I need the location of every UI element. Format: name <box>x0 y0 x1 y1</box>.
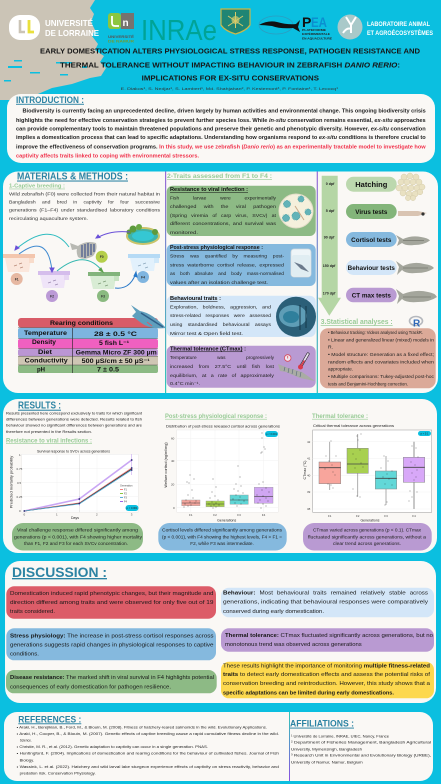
captive breeding text: recirculating aquaculture system. <box>9 216 88 221</box>
chart: cortisol boxplot: Welfare cortisol (ng/ml/mg) <box>164 442 168 488</box>
chart: cortisol boxplot: p < 0.001 <box>266 432 278 436</box>
reference list: Science. <box>20 739 32 743</box>
logo: Université de Lorraine: UNIVERSITÉ <box>45 17 93 28</box>
introduction text: highlights the need for effective conservation strategies to prevent further species loss. While in-situ conservation remains essential, ex-situ approaches <box>16 118 426 124</box>
caption: viral challenge: Viral challenge response differed significantly among <box>17 528 138 533</box>
affiliation list: ² Department of Fisheries Management, Bangladesh Agricultural <box>291 741 431 745</box>
captive breeding text: Wild zebrafish (F0) were collected from their natural habitat in <box>9 191 161 196</box>
header background texture <box>0 0 106 100</box>
timeline arrow: 170 dpf <box>323 291 336 295</box>
reference list: • Wassink, L. et al. (2022). Hatchery and wild larval lake sturgeon experience effects of captivity on stress reactivity, behavior and <box>17 765 279 769</box>
chart: survival response line chart: 0.75 <box>16 467 23 471</box>
caption: CTmax variation: fluctuated significantly across generations, without a <box>308 534 426 539</box>
box: conclusion highlight: specific adaptations can be limited during early domestications. <box>223 691 395 697</box>
box: statistical analyses: • Multiple comparisons: Tukey-adjusted post-hoc <box>328 374 435 379</box>
title: THERMAL TOLERANCE WITHOUT IMPACTING BEHAVIOUR IN ZEBRAFISH DANIO RERIO : <box>60 60 400 69</box>
heading: references: REFERENCES : <box>18 714 81 725</box>
chart: survival response line chart: 3 <box>131 512 133 516</box>
box: thermal tolerance: Thermal tolerance: CTmax fluctuated significantly across generations, but no <box>225 633 433 639</box>
heading: materials and methods: MATERIALS & METHODS : <box>17 170 128 182</box>
chart: survival response line chart: 0 <box>24 512 26 516</box>
rearing conditions table: 500 µS/cm ± 50 µS⁻¹ <box>82 358 150 365</box>
tank F1: F1 <box>15 277 19 281</box>
sub-heading: statistical analyses: 3.Statistical analyses : <box>321 319 393 326</box>
caption: cortisol levels: Cortisol levels differed significantly among generations <box>162 528 283 533</box>
card: thermal tolerance: Temperature was progressively <box>170 355 275 360</box>
rearing conditions table: 28 ± 0.5 °C <box>94 332 138 338</box>
tank F4: F4 <box>141 275 145 279</box>
logo: PEA aquaculture platform: PLATEFORME <box>302 28 326 32</box>
pill: virus tests: Virus tests <box>355 209 388 216</box>
card: resistance to viral infection: different concentrations, and survival was <box>170 221 277 226</box>
chart: cortisol boxplot <box>164 424 280 522</box>
chart: CTmax boxplot: F1 <box>328 514 332 518</box>
chart legend <box>120 484 133 503</box>
timeline arrow: 5 dpf <box>326 209 335 213</box>
rearing conditions table: Rearing conditions <box>50 320 113 327</box>
introduction text: improve the effectiveness of conservation programs. In this study, we use zebrafish ( Danio rerio ) as an experimentally tractable model to investigate how <box>16 144 426 150</box>
card: post-stress physiological response: Post-stress physiological response : <box>170 245 263 251</box>
panel: references and affiliations <box>4 712 433 781</box>
panel: materials and methods <box>3 170 438 393</box>
caption: viral challenge: generations (p < 0.001), with F4 showing higher mortality <box>14 534 143 539</box>
chart: CTmax boxplot: 38 <box>307 507 311 511</box>
caption: cortisol levels <box>158 523 287 550</box>
card: resistance to viral infection: (Spring viremia of carp virus, SVCv) at <box>170 213 277 218</box>
affiliation list: University, Mymensingh, Bangladesh <box>291 747 362 751</box>
icon: juvenile fish <box>396 235 430 246</box>
icon: R logo: R <box>413 318 421 330</box>
logo: PEA aquaculture platform <box>259 14 332 40</box>
icon: larva <box>398 211 427 216</box>
icon: large adult fish <box>396 289 437 304</box>
caption: viral challenge <box>12 523 143 550</box>
logo: Laboratoire Animal et Agroécosystèmes <box>338 14 434 40</box>
logo: university seal <box>221 9 250 34</box>
sub-heading: resistance to viral infections: Resistance to viral infections : <box>6 437 92 444</box>
timeline arrow: 150 dpf <box>323 264 336 268</box>
box: conclusion highlight: conservation breeding and reintroduction. However, this study shows that a <box>223 681 430 687</box>
rearing conditions table: Gemma Micro ZF 300 µm <box>76 351 157 357</box>
pill: behaviour tests: Behaviour tests <box>348 265 395 272</box>
reference list <box>17 726 279 776</box>
chart: CTmax boxplot: CTmax (°C) <box>303 460 307 480</box>
box: domestication summary: Domestication induced rapid phenotypic changes, but their magnitude and <box>10 591 214 597</box>
caption: cortisol levels: F2, while F3 was intermediate. <box>190 541 254 546</box>
box: statistical analyses: R. <box>328 344 333 349</box>
captive breeding text: Bangladesh and bred in captivity for four successive <box>9 200 160 205</box>
card: behavioural traits: stress-related responses were assessed <box>170 313 271 318</box>
introduction text: captivity affects traits linked to coping with environmental stressors. <box>16 154 200 160</box>
pill: hatching: Hatching <box>355 180 388 189</box>
affiliation list <box>291 734 431 764</box>
introduction text <box>16 108 426 160</box>
icon: eggs <box>396 173 425 201</box>
logo: PEA aquaculture platform: EA <box>311 14 327 30</box>
pill: CT max tests <box>346 288 397 302</box>
introduction text: can provide complementary tools to maintain threatened populations and preserve their genetic and phenotypic diversity. However, ex-situ conservation <box>16 126 426 132</box>
reference list: • Araki, H., Cooper, B., & Blouin, M. (2007). Genetic effects of captive breeding cause a rapid cumulative fitness decline in the wild. <box>17 732 279 736</box>
icon: fish over table <box>131 305 166 328</box>
logo: Université de Namur <box>108 13 135 44</box>
chart: CTmax boxplot: 40 <box>307 473 311 477</box>
box: statistical analyses: • Model structure: Generation as a fixed effect; <box>328 352 434 357</box>
chart: survival response line chart: 2 <box>96 512 98 516</box>
rearing conditions table: pH <box>37 366 45 373</box>
heading: discussion: DISCUSSION : <box>12 565 107 580</box>
rearing conditions table: Temperature <box>24 330 67 337</box>
pill: cortisol tests <box>346 232 397 247</box>
box: conclusion highlight: These results highlight the importance of monitoring multiple fitness-related <box>223 664 430 670</box>
card: post-stress physiological response: stress waterborne cortisol release, expressed <box>170 262 284 268</box>
chart: survival response line chart: 1 <box>56 512 58 516</box>
tank F3: F3 <box>101 294 105 298</box>
chart legend: Generation <box>120 484 133 488</box>
introduction text: Biodiversity is currently facing an unprecedented decline, driven largely by human activities and environmental change. This ongoing biodiversity crisis <box>22 108 426 114</box>
box: domestication summary: direction differed among traits and were observed for only five out of 19 <box>10 600 214 606</box>
caption: cortisol levels: (p < 0.001), with F4 showing the highest levels, F4 > F1 = <box>162 534 282 539</box>
chart: CTmax boxplot: F4 <box>412 514 416 518</box>
chart legend: F4 <box>124 500 128 503</box>
card: resistance to viral infection <box>167 186 316 236</box>
panel: results <box>3 399 437 553</box>
box: behaviour <box>221 588 434 617</box>
timeline arrow: 90 dpf <box>324 235 335 239</box>
panel: introduction <box>7 94 435 163</box>
box: statistical analyses: random effects and covariates included when <box>328 359 435 364</box>
logo: Université de Namur: UNIVERSITÉ <box>108 34 134 39</box>
card: behavioural traits: using standardised behavioural assays <box>170 322 272 327</box>
chart: CTmax boxplot: Critical thermal tolerance across generations <box>313 424 394 428</box>
chart: survival response line chart: 0.5 <box>17 481 22 485</box>
card: behavioural traits: Mirror test & Open field test. <box>170 331 243 336</box>
logo: Université de Lorraine <box>9 15 99 40</box>
card: resistance to viral infection: Resistance to viral infection : <box>170 187 248 193</box>
panel: discussion <box>5 561 436 703</box>
chart: CTmax boxplot: 39 <box>307 490 311 494</box>
results introduction text: Results presented here correspond exclusively to traits for which significant <box>6 411 143 416</box>
reference list: • Christie, M. R., et al. (2012). Genetic adaptation to captivity can occur in a single generation. PNAS. <box>17 745 208 749</box>
card: thermal tolerance <box>167 346 316 388</box>
rearing conditions table: Conductivity <box>25 358 68 365</box>
card: post-stress physiological response: values after an isolation challenge test. <box>170 280 268 285</box>
caption: viral challenge: than F1, F2 and F3 for each SVCv concentration. <box>24 541 128 546</box>
chart: survival response line chart <box>8 448 138 520</box>
card: behavioural traits: Behavioural traits : <box>170 296 221 302</box>
authors: E. Diakos¹, S. Nedjar¹, S. Lambert¹, Md. Shahjahan², P. Kestemont³, P. Fontaine¹, T. Lecocq¹ <box>121 86 339 91</box>
chart legend: F1 <box>124 488 128 491</box>
box: statistical analyses: • Behaviour tracking: Videos analysed using TrackR. <box>328 330 423 335</box>
card: resistance to viral infection: monitored. <box>170 230 198 235</box>
affiliation list: University of Namur, Namur, Belgium <box>291 760 363 764</box>
icon: adult fish <box>396 261 434 275</box>
chart: CTmax boxplot: p < 0.1 <box>421 432 429 436</box>
icon: alert, fish and thermometer <box>278 354 315 381</box>
chart: cortisol boxplot: Generations <box>217 518 236 522</box>
tank F2: F2 <box>50 294 54 298</box>
rearing conditions table: 7 ± 0.5 <box>97 367 120 373</box>
captive breeding text <box>9 191 161 221</box>
affiliation list: ³ Research Unit in Environmental and Evolutionary Biology (URBE), <box>291 754 431 758</box>
box: disease resistance <box>6 670 217 693</box>
rearing conditions table: Diet <box>38 349 53 356</box>
card: resistance to viral infection: Fish larvae were experimentally <box>170 196 277 200</box>
box: disease resistance: consequences of early domestication for pathogen resilience. <box>10 685 171 691</box>
arrows between generations <box>15 232 137 288</box>
card: post-stress physiological response: as both absolute and body mass-normalised <box>170 271 284 276</box>
box: thermal tolerance: monotonous trend was observed across generations <box>225 642 362 648</box>
reference list: predation risk. Conservation Physiology. <box>20 772 96 776</box>
box: behaviour: Behaviour: Most behavioural traits remained relatively stable across <box>223 591 428 597</box>
chart: CTmax boxplot: Generations <box>360 518 380 522</box>
heading: results: RESULTS : <box>18 400 61 412</box>
logo: PEA aquaculture platform: EN AQUACULTURE <box>302 36 332 40</box>
affiliation list: ¹ Université de Lorraine, INRAE, UIEC, Nancy, France <box>291 734 389 738</box>
sub-heading: thermal tolerance: Thermal tolerance : <box>312 414 368 420</box>
caption: CTmax variation <box>303 523 432 550</box>
logo: INRAE: INRAe <box>141 15 217 47</box>
icon: beaker with fish <box>291 249 311 277</box>
pill: CT max tests: CT max tests <box>352 292 391 299</box>
chart: cortisol boxplot: 60 <box>171 436 175 440</box>
results introduction text <box>6 411 143 434</box>
chart legend: F2 <box>124 492 128 495</box>
box: thermal tolerance <box>221 628 434 652</box>
chart legend: F3 <box>124 496 128 499</box>
chart: cortisol boxplot: F3 <box>237 513 241 517</box>
chart: cortisol boxplot: F4 <box>262 513 266 517</box>
box: disease resistance: Disease resistance: The marked shift in viral survival in F4 highlights potential <box>10 675 214 681</box>
box: statistical analyses <box>320 328 436 388</box>
rearing conditions table <box>18 305 166 373</box>
tank F3 <box>88 272 120 302</box>
sub-heading: captive breeding: 1-Captive breeding : <box>9 184 65 190</box>
caption: CTmax variation: clear trend across generations. <box>333 541 401 546</box>
logo: Université de Lorraine: DE LORRAINE <box>45 28 99 38</box>
box: stress physiology: conditions. <box>10 652 39 658</box>
rearing conditions table: 5 fish L⁻¹ <box>99 340 129 347</box>
captive breeding text: generations (F1–F4) under standardised laboratory conditions <box>9 208 161 213</box>
timeline arrow <box>318 176 341 316</box>
card: resistance to viral infection: challenged with the viral pathogen <box>170 204 276 209</box>
chart: CTmax boxplot: 41 <box>307 456 311 460</box>
breeding diagram <box>3 224 160 302</box>
chart: CTmax boxplot <box>303 424 432 522</box>
rearing conditions table: Density <box>32 339 56 346</box>
box: domestication summary: traits considered. <box>10 609 55 615</box>
pill: virus tests <box>346 204 397 219</box>
heading: introduction: INTRODUCTION : <box>16 95 84 106</box>
results introduction text: therefore not presented in the Results section. <box>6 429 92 434</box>
box: behaviour: generations, indicating that behavioural responses were comparatively <box>223 600 428 606</box>
reference list: • Huntingford, F. (2004). Implications of domestication and rearing conditions for the behaviour of cultivated fishes. Journal of Fish <box>17 752 279 756</box>
results introduction text: differences between generations were detected. Results related to fish <box>6 417 142 422</box>
chart: cortisol boxplot: Distribution of post-stress released cortisol across generations <box>166 424 280 428</box>
card: behavioural traits: Exploration, boldness, aggression, and <box>170 304 271 310</box>
tank F2 <box>38 271 70 302</box>
card: behavioural traits <box>167 296 316 337</box>
box: conclusion highlight: traits to detect early domestication effects and assess the potential risks of <box>223 672 431 678</box>
chart: survival response line chart: 1 <box>19 453 21 457</box>
chart: cortisol boxplot: F2 <box>213 513 217 517</box>
pill: hatching <box>346 177 397 192</box>
chart: cortisol boxplot: 40 <box>171 459 175 463</box>
card: thermal tolerance: 0.4°C min⁻¹. <box>170 381 200 386</box>
icon: zebrafish F0: F0 <box>100 255 104 259</box>
chart: cortisol boxplot: F1 <box>189 513 193 517</box>
heading: affiliations: AFFILIATIONS : <box>290 719 354 730</box>
card: thermal tolerance: Thermal tolerance (CTmax) : <box>170 346 246 352</box>
box: statistical analyses: • Linear and generalized linear (mixed) models in <box>328 337 435 342</box>
logo: PEA aquaculture platform: P <box>302 14 311 30</box>
sub-heading: post-stress physiological response: Post-stress physiological response : <box>165 414 267 420</box>
chart: CTmax boxplot: F2 <box>356 514 360 518</box>
results introduction text: behaviour showed no significant differences between generations and are <box>6 423 142 428</box>
box: stress physiology: generations suggests rapid changes in physiological responses to captive <box>10 643 214 649</box>
chart: survival response line chart: 0.25 <box>16 495 23 499</box>
chart: survival response line chart: Survival response to SVCv across generations <box>37 448 110 453</box>
chart: survival response line chart: Predicted mortality probability <box>8 456 14 508</box>
box: behaviour: conserved during early domestication. <box>223 609 324 615</box>
box: stress physiology <box>6 628 216 660</box>
chart: survival response line chart: 0 <box>19 509 21 513</box>
chart: survival response line chart: p < 0.001 <box>127 506 138 510</box>
logo: Université de Namur: n <box>122 18 129 29</box>
logo: Laboratoire Animal et Agroécosystèmes: LABORATOIRE ANIMAL <box>367 21 430 28</box>
chart: survival response line chart: Days <box>71 516 79 520</box>
timeline arrow: 0 dpf <box>326 182 335 186</box>
icon: behaviour test arena <box>276 297 316 337</box>
box: domestication summary <box>6 586 216 619</box>
box: statistical analyses: appropriate. <box>328 367 353 372</box>
title <box>40 47 420 82</box>
reference list: Biology. <box>20 758 34 762</box>
pill: cortisol tests: Cortisol tests <box>351 237 392 244</box>
card: post-stress physiological response: Stress was quantified by measuring post- <box>170 254 284 258</box>
introduction text: implies a domestication process that can lead to specific adaptations. Understanding how organisms respond to ex-situ conditions is therefore crucial to <box>16 135 426 141</box>
reference list: • Araki, H., Berejikian, B., Ford, M., & Blouin, M. (2008). Fitness of hatchery-reared salmonids in the wild. Evolutionary Applications. <box>17 726 267 730</box>
chart: cortisol boxplot: 20 <box>171 482 175 486</box>
chart: CTmax boxplot: F3 <box>384 514 388 518</box>
card: thermal tolerance: equilibrium, at a rate of approximately <box>170 373 275 378</box>
chart: cortisol boxplot: 0 <box>173 506 175 510</box>
logo: Université de Namur: DE NAMUR <box>108 40 135 44</box>
tank F4 <box>128 254 160 283</box>
box: statistical analyses: tests and Benjamini-Hochberg correction. <box>328 382 408 387</box>
icon: petri dish with viruses <box>279 194 313 228</box>
chart: CTmax boxplot: 42 <box>307 440 311 444</box>
sub-heading: traits assessed: 2-Traits assessed from F1 to F4 : <box>167 173 272 180</box>
logo: PEA aquaculture platform: EXPÉRIMENTALE <box>302 31 330 36</box>
tank F1 <box>3 254 35 285</box>
pill: behaviour tests <box>346 260 397 275</box>
icon: pond <box>126 224 159 244</box>
icon: R logo <box>410 316 422 330</box>
title: EARLY DOMESTICATION ALTERS PHYSIOLOGICAL STRESS RESPONSE, PATHOGEN RESISTANCE AND <box>40 47 420 56</box>
title: IMPLICATIONS FOR EX-SITU CONSERVATIONS <box>142 73 319 82</box>
box: conclusion highlight <box>221 662 434 698</box>
icon: zebrafish F0 <box>70 242 108 263</box>
card: thermal tolerance: increased from 27.5°C until fish lost <box>170 364 275 369</box>
box: stress physiology: Stress physiology: The increase in post-stress cortisol responses across <box>10 634 214 640</box>
caption: CTmax variation: CTmax varied across generations (p < 0.1). CTmax <box>313 528 422 533</box>
card: post-stress physiological response <box>167 244 316 286</box>
column dividers <box>165 172 318 393</box>
